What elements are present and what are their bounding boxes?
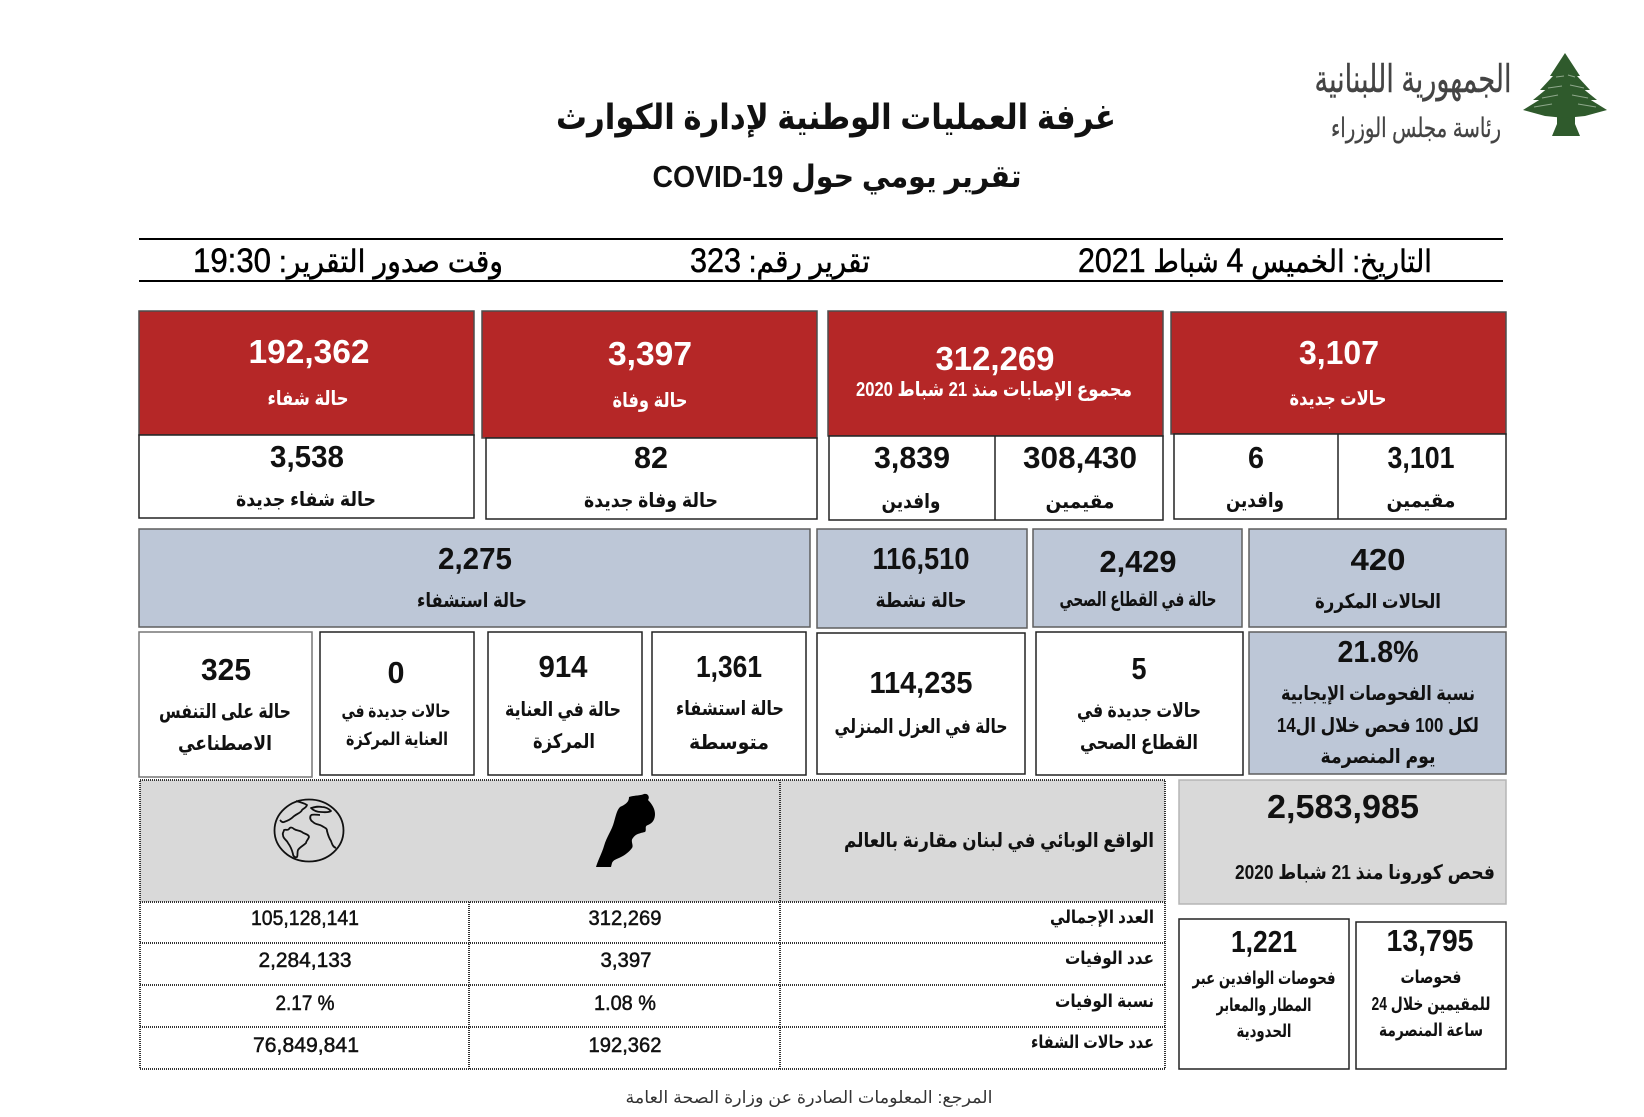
panel: arrivals tests: المطار والمعابر: [1216, 995, 1312, 1016]
panel: repeated cases: الحالات المكررة: [1315, 591, 1441, 613]
panel: positivity rate: نسبة الفحوصات الإيجابية: [1281, 683, 1475, 705]
panel: residents tests: 13,795: [1386, 923, 1474, 958]
panel: new ICU cases: [320, 632, 474, 775]
panel: on ventilator: 325: [201, 652, 251, 687]
new cases: 3,107: [1299, 334, 1379, 371]
label: وافدين: [1226, 490, 1284, 512]
panel: residents tests: ساعة المنصرمة: [1379, 1020, 1483, 1041]
icon: Lebanon map: [596, 794, 655, 867]
label: مقيمين: [1046, 491, 1114, 513]
panel: repeated cases: [1249, 529, 1506, 627]
panel: new health sector cases: 5: [1132, 651, 1146, 686]
panel: total tests: 2,583,985: [1267, 788, 1419, 825]
heading: daily report: تقرير يومي حول COVID-19: [652, 159, 1022, 195]
row: death rate: 1.08 %: [594, 992, 656, 1015]
total recoveries: 192,362: [248, 333, 370, 370]
label: حالة شفاء: [268, 388, 348, 410]
panel: moderate hospital cases: متوسطة: [689, 732, 769, 754]
row: deaths: 2,284,133: [258, 949, 352, 972]
panel: arrivals tests: 1,221: [1231, 924, 1297, 959]
panel: on ventilator: [139, 632, 312, 777]
panel: arrivals tests: الحدودية: [1236, 1021, 1292, 1042]
residents: 308,430: [1023, 440, 1137, 475]
panel: home isolation: حالة في العزل المنزلي: [834, 716, 1008, 739]
panel: health sector cases: [1033, 529, 1242, 627]
panel: total tests: فحص كورونا منذ 21 شباط 2020: [1235, 862, 1495, 884]
row: total: العدد الإجمالي: [1050, 907, 1154, 928]
panel: hospitalised: [139, 529, 810, 627]
panel: arrivals tests: [1179, 919, 1349, 1069]
panel: recoveries: [139, 311, 474, 518]
panel: new health sector cases: حالات جديدة في: [1077, 700, 1201, 723]
total cases: 312,269: [936, 340, 1054, 377]
row: death rate: 2.17 %: [276, 992, 334, 1015]
label: مجموع الإصابات منذ 21 شباط 2020: [856, 379, 1132, 401]
panel: new health sector cases: [1036, 632, 1243, 775]
calligraphy: republic name: الجمهورية اللبنانية: [1314, 59, 1512, 102]
panel: positivity rate: لكل 100 فحص خلال ال14: [1277, 715, 1479, 737]
panel: ICU cases: 914: [538, 649, 588, 684]
panel: active cases: [817, 529, 1027, 628]
panel: hospitalised: 2,275: [438, 541, 512, 576]
total deaths: 3,397: [608, 335, 692, 372]
panel: active cases: 116,510: [872, 541, 970, 576]
report date: التاريخ: الخميس 4 شباط 2021: [1078, 242, 1432, 280]
comparison table: Lebanon vs world: [140, 780, 1165, 1069]
label: حالة وفاة: [612, 390, 688, 412]
panel: total cases: [828, 311, 1163, 520]
row: total: 312,269: [588, 907, 662, 930]
panel: ICU cases: [488, 632, 642, 775]
row: death rate: نسبة الوفيات: [1055, 991, 1154, 1012]
new recoveries: 3,538: [270, 439, 344, 474]
row: death rate: [276, 991, 1154, 1015]
row: total: 105,128,141: [251, 907, 359, 930]
panel: deaths: [482, 311, 817, 519]
panel: repeated cases: 420: [1350, 542, 1406, 577]
label: حالة وفاة جديدة: [584, 490, 718, 512]
icon: globe: [274, 800, 344, 862]
report time: وقت صدور التقرير: 19:30: [193, 242, 503, 280]
new deaths: 82: [634, 440, 668, 475]
panel: health sector cases: حالة في القطاع الصحي: [1060, 589, 1216, 612]
row: deaths: [258, 948, 1154, 972]
arrivals: 6: [1248, 440, 1264, 475]
panel: new health sector cases: القطاع الصحي: [1080, 732, 1198, 755]
panel: active cases: حالة نشطة: [876, 590, 966, 612]
row: recoveries: 192,362: [588, 1034, 662, 1057]
residents: 3,101: [1388, 440, 1454, 475]
row: recoveries: [253, 1032, 1154, 1057]
arrivals: 3,839: [874, 440, 950, 475]
panel: new ICU cases: العناية المركزة: [346, 729, 448, 750]
row: recoveries: عدد حالات الشفاء: [1031, 1032, 1154, 1052]
heading: operations room: غرفة العمليات الوطنية لإدارة الكوارث: [556, 98, 1116, 138]
panel: total tests: [1179, 780, 1506, 904]
calligraphy: presidency: رئاسة مجلس الوزراء: [1331, 113, 1501, 144]
panel: positivity rate: 21.8%: [1338, 634, 1418, 669]
panel: positivity rate: [1249, 632, 1506, 774]
panel: new ICU cases: حالات جديدة في: [342, 701, 450, 722]
panel: health sector cases: 2,429: [1100, 544, 1176, 579]
panel: hospitalised: حالة استشفاء: [417, 590, 527, 612]
row: deaths: عدد الوفيات: [1065, 948, 1154, 969]
title: [556, 98, 1116, 195]
panel: residents tests: للمقيمين خلال 24: [1372, 994, 1490, 1015]
panel: new cases: [1171, 312, 1506, 519]
report number: تقرير رقم: 323: [690, 242, 870, 280]
row: recoveries: 76,849,841: [253, 1034, 359, 1057]
report info bar: [139, 238, 1503, 282]
row: deaths: 3,397: [600, 949, 652, 972]
label: حالات جديدة: [1290, 388, 1386, 410]
panel: new ICU cases: 0: [388, 655, 404, 690]
label: حالة شفاء جديدة: [236, 489, 376, 511]
panel: residents tests: [1356, 922, 1506, 1069]
panel: moderate hospital cases: حالة استشفاء: [676, 698, 784, 720]
panel: on ventilator: حالة على التنفس: [159, 701, 291, 723]
panel: positivity rate: يوم المنصرمة: [1320, 746, 1436, 768]
source footer: المرجع: المعلومات الصادرة عن وزارة الصحة العامة: [626, 1088, 992, 1108]
row: total: [251, 907, 1154, 930]
table heading: الواقع الوبائي في لبنان مقارنة بالعالم: [844, 830, 1154, 853]
panel: home isolation: [817, 633, 1025, 774]
label: وافدين: [882, 491, 940, 513]
panel: moderate hospital cases: [652, 632, 806, 775]
panel: on ventilator: الاصطناعي: [178, 733, 272, 756]
icon: cedar tree: [1523, 53, 1607, 136]
panel: residents tests: فحوصات: [1400, 967, 1462, 988]
panel: ICU cases: حالة في العناية: [505, 699, 621, 722]
panel: moderate hospital cases: 1,361: [696, 649, 762, 684]
label: مقيمين: [1386, 490, 1456, 512]
logo: Lebanese Republic presidency of the council of ministers: [1314, 53, 1607, 144]
panel: arrivals tests: فحوصات الوافدين عبر: [1192, 968, 1336, 989]
panel: home isolation: 114,235: [870, 665, 972, 700]
panel: ICU cases: المركزة: [533, 731, 595, 753]
